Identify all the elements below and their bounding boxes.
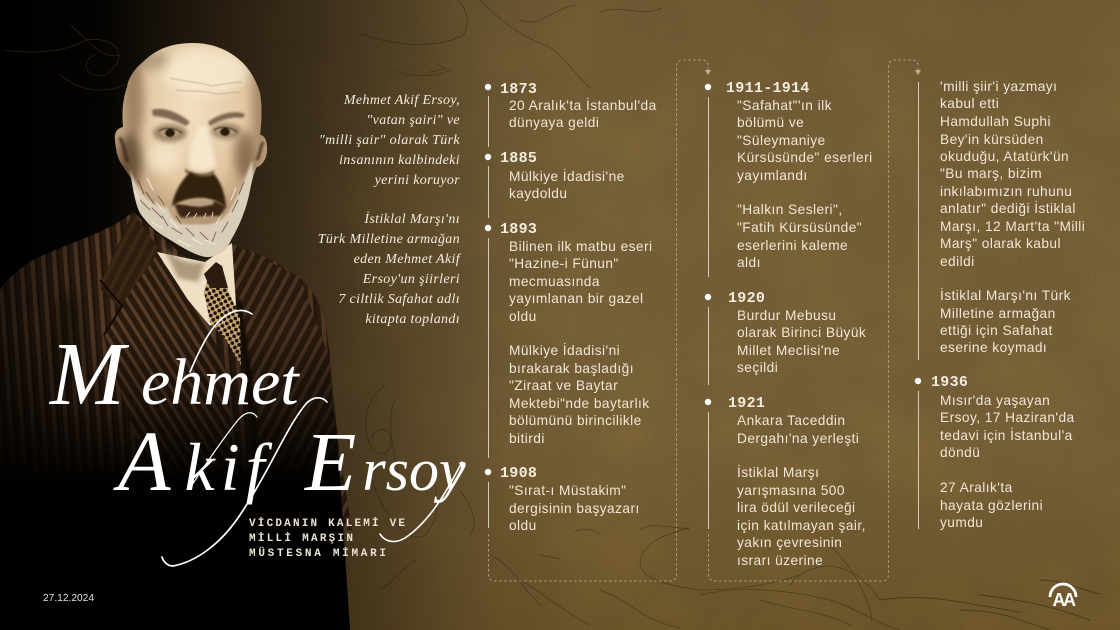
entry 1921: Dergahı'na yerleşti: [737, 431, 859, 446]
ear shadows: [119, 138, 263, 162]
entry 1921 continued: Milletine armağan: [940, 306, 1056, 321]
entry 1921: için katılmayan şair,: [737, 518, 866, 533]
necktie: [204, 262, 241, 366]
connector arrowheads: [705, 70, 921, 75]
entry 1893: [485, 221, 652, 458]
entry 1921 continued: Hamdullah Suphi: [940, 114, 1051, 129]
eye sockets: [153, 124, 187, 142]
entry 1893: Mektebi"nde baytarlık: [509, 396, 650, 411]
entry 1911-1914: bölümü ve: [737, 115, 804, 130]
entry 1921 continued: [918, 79, 1085, 360]
title flourishes: [162, 310, 462, 566]
entry 1911-1914: "Halkın Sesleri",: [737, 202, 843, 217]
entry 1885: [485, 150, 625, 218]
entry 1921 continued: 'milli şiir'i yazmayı: [940, 79, 1057, 94]
entry 1908: "Sırat-ı Müstakim": [509, 483, 626, 498]
entry 1873: dünyaya geldi: [509, 115, 599, 130]
entry 1893: bölümünü birincilikle: [509, 413, 642, 428]
main title: Mehmet: [48, 325, 300, 424]
entry 1921 continued: Bey'in kürsüden: [940, 132, 1044, 147]
date: 27.12.2024: [43, 593, 94, 604]
entry 1921: İstiklal Marşı: [737, 465, 819, 480]
entry 1893: Bilinen ilk matbu eseri: [509, 239, 652, 254]
intro text: [318, 93, 462, 327]
entry 1893: 1893: [500, 221, 537, 238]
entry 1911-1914: "Safahat"'ın ilk: [737, 98, 832, 113]
entry 1921 continued: ettiği için Safahat: [940, 323, 1053, 338]
intro text: "vatan şairi" ve: [366, 113, 460, 128]
entry 1921: ısrarı üzerine: [737, 553, 823, 568]
intro text: eden Mehmet Akif: [354, 252, 462, 267]
entry 1908: dergisinin başyazarı: [509, 501, 640, 516]
entry 1911-1914: yayımlandı: [737, 168, 808, 183]
brows: [152, 109, 190, 126]
entry 1921 continued: Marşı, 12 Mart'ta "Milli: [940, 219, 1085, 234]
timeline column 1: [485, 81, 657, 533]
main title: Ersoy: [304, 416, 466, 509]
entry 1921 continued: eserine koymadı: [940, 340, 1047, 355]
cheek shadows: [118, 134, 142, 186]
entry 1911-1914: [705, 80, 873, 277]
entry 1908: oldu: [509, 518, 537, 533]
entry 1920: Burdur Mebusu: [737, 308, 836, 323]
entry 1911-1914: "Fatih Kürsüsünde": [737, 220, 862, 235]
entry 1921 continued: okuduğu, Atatürk'ün: [940, 149, 1069, 164]
subtitle: VİCDANIN KALEMİ VE: [249, 517, 405, 530]
main title: [48, 310, 466, 566]
entry 1911-1914: Kürsüsünde" eserleri: [737, 150, 873, 165]
entry 1921: lira ödül verileceği: [737, 500, 856, 515]
intro text: yerini koruyor: [373, 173, 460, 188]
forehead highlight: [163, 48, 247, 96]
entry 1893: bitirdi: [509, 431, 545, 446]
entry 1936: Mısır'da yaşayan: [940, 393, 1050, 408]
entry 1921 continued: "Bu marş, bizim: [940, 166, 1042, 181]
timeline connectors: [488, 60, 918, 581]
entry 1873: [485, 81, 657, 147]
entry 1893: bırakarak başladığı: [509, 361, 634, 376]
entry 1921 continued: anlatır" dediği İstiklal: [940, 201, 1076, 216]
entry 1921 continued: inkılabımızın ruhunu: [940, 184, 1072, 199]
entry 1885: Mülkiye İdadisi'ne: [509, 169, 625, 184]
entry 1921: yarışmasına 500: [737, 483, 845, 498]
intro text: İstiklal Marşı'nı: [363, 211, 460, 227]
forehead wrinkles: [170, 78, 242, 94]
entry 1920: olarak Birinci Büyük: [737, 325, 866, 340]
main title: Akif: [113, 413, 273, 509]
entry 1920: [705, 290, 866, 385]
subtitle: [249, 517, 405, 560]
intro text: Mehmet Akif Ersoy,: [343, 93, 460, 108]
entry 1936: tedavi için İstanbul'a: [940, 428, 1073, 443]
intro text: 7 ciltlik Safahat adlı: [338, 292, 460, 307]
entry 1921: [705, 395, 866, 568]
background ornaments: calligraphic flourishes: [360, 0, 1100, 630]
entry 1920: Millet Meclisi'ne: [737, 343, 840, 358]
intro text: kitapta toplandı: [365, 312, 460, 327]
eyes: [159, 128, 237, 137]
entry 1936: [915, 374, 1075, 530]
entry 1885: 1885: [500, 150, 537, 167]
entry 1921 continued: edildi: [940, 254, 975, 269]
intro text: Ersoy'un şiirleri: [362, 272, 460, 287]
top-left faint ornament: [5, 25, 125, 90]
entry 1920: 1920: [728, 290, 765, 307]
entry 1908: 1908: [500, 465, 537, 482]
entry 1893: "Ziraat ve Baytar: [509, 378, 618, 393]
intro text: "milli şair" olarak Türk: [319, 133, 460, 148]
entry 1893: Mülkiye İdadisi'ni: [509, 343, 620, 358]
entry 1921: Ankara Taceddin: [737, 413, 845, 428]
entry 1885: kaydoldu: [509, 186, 567, 201]
entry 1893: oldu: [509, 309, 537, 324]
icon: AA agency logo: AA: [1052, 590, 1076, 610]
entry 1936: döndü: [940, 445, 980, 460]
timeline column 3: [915, 79, 1085, 530]
icon: AA agency logo: [1050, 584, 1076, 610]
entry 1893: "Hazine-i Fünun": [509, 256, 619, 271]
entry 1873: 20 Aralık'ta İstanbul'da: [509, 98, 657, 113]
timeline column 2: [705, 80, 873, 568]
portrait of Mehmet Akif Ersoy: [0, 43, 352, 530]
entry 1936: hayata gözlerini: [940, 498, 1043, 513]
nose: [189, 125, 216, 171]
entry 1921 continued: kabul etti: [940, 96, 999, 111]
entry 1936: yumdu: [940, 515, 983, 530]
dark lower-left panel: [0, 330, 350, 630]
entry 1936: Ersoy, 17 Haziran'da: [940, 410, 1075, 425]
entry 1893: yayımlanan bir gazel: [509, 291, 644, 306]
subtitle: MÜSTESNA MİMARI: [249, 547, 386, 560]
intro text: insanının kalbindeki: [339, 153, 460, 168]
intro text: Türk Milletine armağan: [318, 232, 460, 247]
entry 1893: mecmuasında: [509, 274, 600, 289]
entry 1936: 27 Aralık'ta: [940, 480, 1013, 495]
entry 1921: yakın çevresinin: [737, 535, 842, 550]
shirt and collar: [157, 243, 236, 326]
subtitle: MİLLİ MARŞIN: [249, 532, 353, 545]
entry 1911-1914: "Süleymaniye: [737, 133, 826, 148]
entry 1911-1914: aldı: [737, 255, 761, 270]
entry 1920: seçildi: [737, 360, 778, 375]
moustache and mouth: [172, 172, 226, 208]
entry 1873: 1873: [500, 81, 537, 98]
entry 1911-1914: eserlerini kaleme: [737, 238, 848, 253]
coat: [0, 200, 352, 530]
entry 1911-1914: 1911-1914: [726, 80, 810, 97]
entry 1936: 1936: [931, 374, 968, 391]
beard: [130, 160, 255, 262]
entry 1921 continued: İstiklal Marşı'nı Türk: [940, 288, 1071, 303]
entry 1921 continued: Marş" olarak kabul: [940, 236, 1061, 251]
entry 1908: [485, 465, 640, 533]
entry 1921: 1921: [728, 395, 765, 412]
head: [115, 43, 267, 262]
